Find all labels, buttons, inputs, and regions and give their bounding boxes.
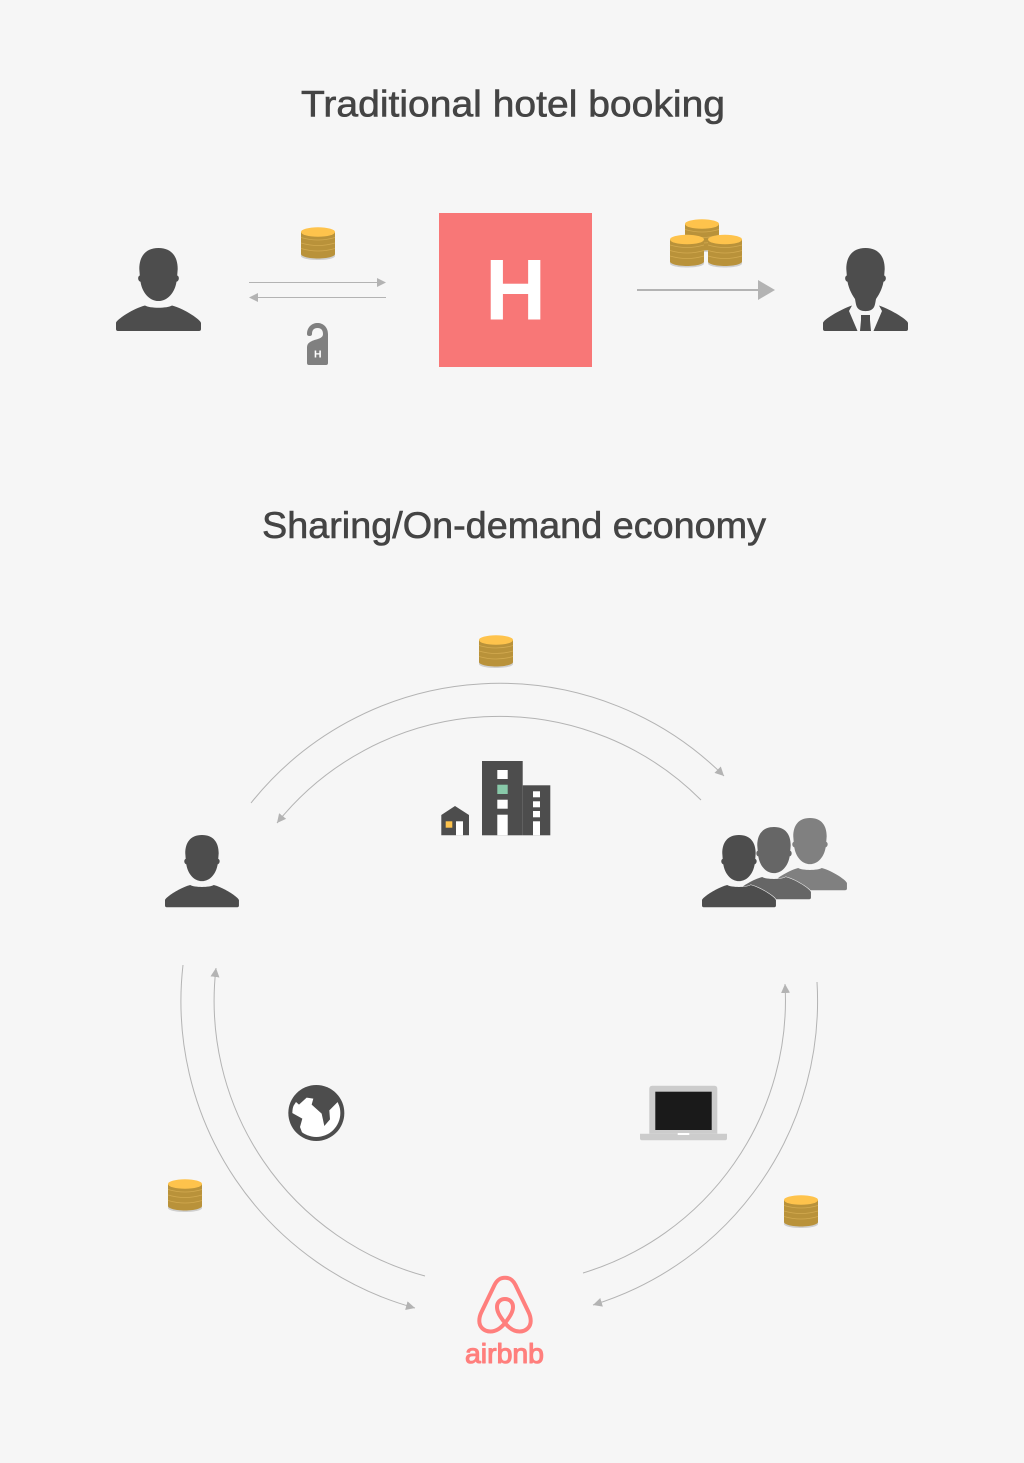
arrow: right outer arc to airbnb: [593, 982, 818, 1305]
heading: traditional hotel booking: Traditional hotel booking: [301, 84, 725, 124]
icon: door hanger: H: [314, 348, 322, 360]
icon: guest: [165, 835, 239, 907]
arrow: left outer arc to airbnb: [181, 965, 415, 1308]
icon: house and buildings: [441, 761, 550, 835]
arrow: revenue to owner: [637, 280, 775, 300]
arrow: left inner arc to guest: [214, 968, 425, 1276]
icon: guest: [116, 248, 201, 331]
icon: coins top: [479, 635, 513, 668]
heading: sharing economy: Sharing/On-demand economy: [262, 505, 766, 546]
arrow: payment to hotel: [249, 278, 386, 287]
icon: laptop: [640, 1086, 727, 1140]
icon: globe: [288, 1085, 344, 1141]
icon: three coin stacks: [670, 219, 742, 268]
panel: traditional hotel booking: [116, 84, 908, 367]
arrow: right inner arc to hosts: [583, 984, 785, 1273]
icon: group of hosts: [702, 818, 847, 907]
icon: coins right: [784, 1195, 818, 1228]
icon: coins left: [168, 1179, 202, 1212]
logo: airbnb: airbnb: [465, 1338, 544, 1369]
arrow: top outer arc to hosts: [251, 683, 724, 803]
hotel tile: [439, 213, 592, 367]
icon: door hanger: [307, 323, 328, 365]
arrow: top inner arc to guest: [277, 716, 701, 823]
icon: hotel owner in suit: [823, 248, 908, 331]
icon: single coin stack: [301, 227, 335, 260]
panel: sharing on-demand economy: [165, 505, 847, 1369]
hotel tile: H: [485, 243, 546, 339]
logo: airbnb: [465, 1278, 544, 1369]
arrow: room back to guest: [249, 293, 386, 302]
